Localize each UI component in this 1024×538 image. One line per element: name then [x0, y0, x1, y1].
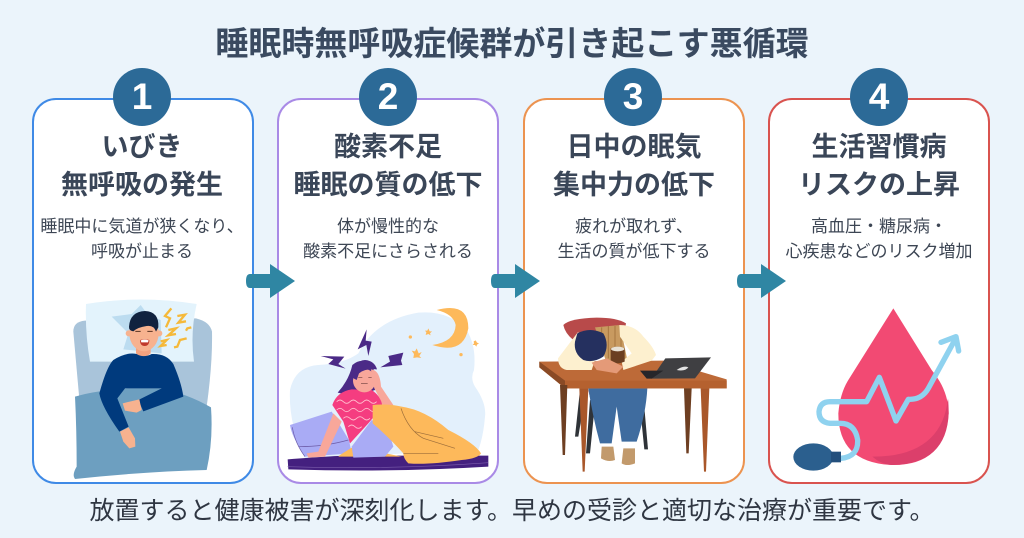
heading: step 2: 睡眠の質の低下: [294, 170, 482, 200]
heading: step 1: いびき: [102, 132, 182, 162]
text: step 3 description: 生活の質が低下する: [558, 242, 710, 261]
number badge 4: [850, 68, 908, 126]
icon: woman with headache at night: [288, 308, 488, 470]
icon: exhausted man asleep at desk: [539, 318, 727, 472]
number badge 2: 2: [378, 76, 398, 117]
text: step 1 description: 呼吸が止まる: [91, 242, 193, 261]
heading: step 3: 集中力の低下: [553, 170, 715, 200]
panel: step 1 card: [32, 98, 254, 484]
number badge 4: 4: [869, 76, 889, 117]
text: step 3 description: [558, 217, 710, 261]
heading: step 2: [294, 132, 482, 200]
text: step 2 description: 体が慢性的な: [337, 217, 439, 236]
text: step 3 description: 疲れが取れず、: [575, 217, 693, 236]
footer message: 放置すると健康被害が深刻化します。早めの受診と適切な治療が重要です。: [89, 497, 934, 525]
text: step 2 description: [303, 217, 473, 261]
text: step 2 description: 酸素不足にさらされる: [303, 242, 473, 261]
text: step 4 description: [786, 217, 972, 261]
number badge 1: 1: [132, 76, 152, 117]
heading: step 4: リスクの上昇: [798, 170, 960, 200]
heading: step 1: [61, 132, 223, 200]
heading: step 3: [553, 132, 715, 200]
heading: step 1: 無呼吸の発生: [61, 170, 223, 200]
arrow: step 3 to 4: [737, 264, 786, 298]
text: step 1 description: 睡眠中に気道が狭くなり、: [40, 217, 244, 236]
panel: step 2 card: [277, 98, 499, 484]
number badge 1: [113, 68, 171, 126]
heading: step 4: 生活習慣病: [812, 132, 946, 162]
number badge 2: [359, 68, 417, 126]
text: step 4 description: 心疾患などのリスク増加: [786, 242, 972, 261]
arrow: step 2 to 3: [491, 264, 540, 298]
panel: step 4 card: [768, 98, 990, 484]
number badge 3: [604, 68, 662, 126]
icon: blood drop with rising pressure line: [793, 308, 962, 471]
text: step 1 description: [40, 217, 244, 261]
panel: step 3 card: [523, 98, 745, 484]
heading: step 2: 酸素不足: [334, 132, 442, 162]
number badge 3: 3: [623, 76, 643, 117]
heading: step 4: [798, 132, 960, 200]
icon: snoring man in bed: [73, 300, 212, 479]
text: step 4 description: 高血圧・糖尿病・: [811, 217, 947, 236]
arrow: step 1 to 2: [246, 264, 295, 298]
heading: step 3: 日中の眠気: [566, 132, 702, 162]
title: 睡眠時無呼吸症候群が引き起こす悪循環: [215, 25, 809, 62]
